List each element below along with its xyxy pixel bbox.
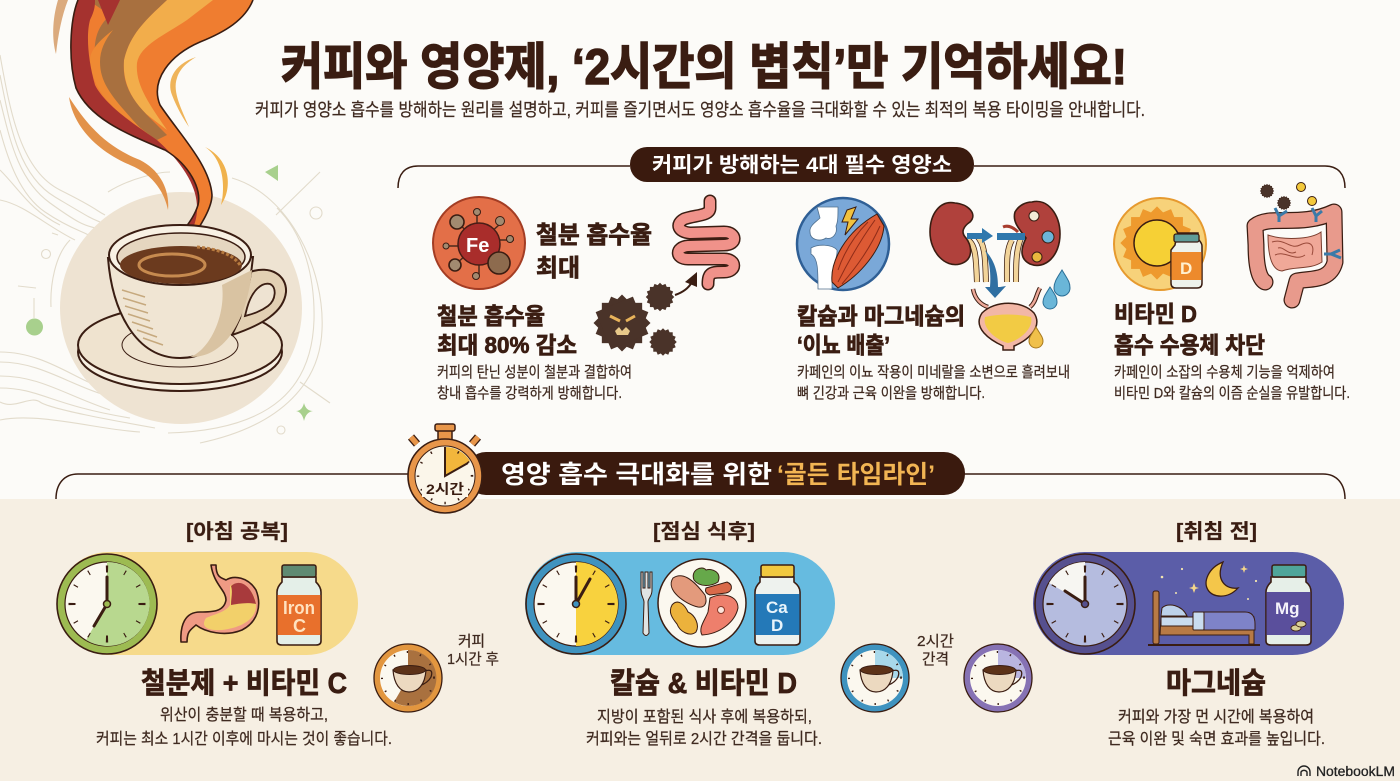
icon: intestine: [678, 201, 734, 284]
icon: bladder: [973, 288, 1040, 350]
icon: water drops: [1029, 270, 1070, 348]
text: vitamin D description: 카페인이 소잡의 수용체 기능을 억제하여: [1114, 364, 1335, 381]
icon: sun and vitamin D bottle: D: [1180, 259, 1192, 278]
text: two hour interval: [917, 633, 954, 668]
icon: Mg bottle: [1266, 565, 1311, 645]
icon: iron C bottle: C: [293, 616, 306, 636]
text: lunch label: [점심 식후]: [653, 520, 755, 543]
text: iron label: 철분 흡수율: [536, 222, 652, 249]
icon: coffee clock purple: [964, 644, 1032, 712]
icon: coffee steam: [53, 0, 253, 264]
text: morning description: 위산이 충분할 때 복용하고,: [160, 706, 328, 724]
icon: stomach: [181, 565, 259, 642]
panel: calcium and magnesium: [797, 198, 1070, 402]
icon: bone and muscle: [797, 198, 889, 290]
text: bedtime description: [1108, 708, 1325, 748]
icon: iron molecule: Fe: [466, 235, 489, 257]
text: iron description: 커피의 탄닌 성분이 철분과 결합하여: [437, 364, 632, 381]
text: lunch description: 지방이 포함된 식사 후에 복용하되,: [597, 708, 812, 726]
decorative background line art: [0, 55, 330, 443]
text: vitamin D description: 비타민 D와 칼슘의 이즘 순실을 유발합니다.: [1114, 385, 1350, 402]
icon: iron C bottle: [277, 565, 321, 645]
text: vitamin D description: [1114, 364, 1350, 402]
text: morning description: 커피는 최소 1시간 이후에 마시는 것이 좋습니다.: [96, 730, 392, 748]
text: coffee one hour after: [447, 633, 499, 668]
icon: plate with food: [658, 559, 746, 647]
icon: stopwatch: [408, 424, 482, 513]
icon: coffee clock blue: [841, 644, 909, 712]
text: bedtime heading: 마그네슘: [1166, 667, 1266, 700]
icon: fork: [641, 572, 652, 636]
text: lunch heading: 칼슘 & 비타민 D: [610, 667, 797, 700]
panel: bedtime: [1033, 520, 1344, 748]
section heading: golden timeline: [56, 452, 1345, 499]
text: iron description: [437, 364, 632, 402]
text: two hour interval: 2시간: [917, 633, 954, 650]
text: calcium description: 카페인의 이뇨 작용이 미네랄을 소변으로 흘려보내: [797, 364, 1070, 381]
text: lunch description: [586, 708, 822, 748]
text: bedtime label: [취침 전]: [1176, 520, 1257, 543]
text: coffee one hour after: 커피: [458, 633, 485, 650]
text: coffee one hour after: 1시간 후: [447, 651, 499, 668]
panel: morning: [57, 520, 392, 748]
text: morning label: [아침 공복]: [186, 520, 288, 543]
text: vitamin D heading: 비타민 D: [1114, 301, 1197, 327]
text: calcium heading line 2: ‘이뇨 배출’: [797, 332, 890, 358]
icon: stopwatch: 2시간: [426, 481, 464, 497]
text: iron description: 창내 흡수를 강력하게 방해합니다.: [437, 385, 622, 402]
section heading: golden timeline: ‘골든 타임라인’: [777, 461, 935, 489]
icon: coffee clock one hour: [374, 644, 442, 712]
title: 커피와 영양제, ‘2시간의 볍칙’만 기억하세요!: [281, 39, 1127, 95]
icon: large intestine with receptors: [1255, 182, 1341, 300]
text: iron heading: 철분 흡수율: [437, 303, 545, 329]
subtitle: 커피가 영양소 흡수를 방해하는 원리를 설명하고, 커피를 즐기면서도 영양소 흡수율을 극대화할 수 있는 최적의 복용 타이밍을 안내합니다.: [255, 100, 1145, 120]
icon: green decorations: [26, 165, 313, 421]
panel: vitamin D: [1114, 182, 1350, 402]
section heading: golden timeline: 영양 흡수 극대화를 위한: [501, 461, 772, 489]
cup backdrop circle: [60, 192, 302, 424]
icon: moon and stars: [1161, 562, 1257, 600]
text: bedtime description: 커피와 가장 먼 시간에 복용하여: [1118, 708, 1314, 726]
icon: iron C bottle: Iron: [283, 598, 315, 618]
icon: coffee cup: [78, 225, 286, 391]
icon: iron molecule: [433, 197, 525, 289]
icon: Ca D bottle: D: [771, 616, 783, 635]
pill: lunch: [525, 552, 835, 655]
icon: sun and vitamin D bottle: [1114, 198, 1206, 290]
text: morning heading: 철분제 + 비타민 C: [141, 667, 347, 700]
text: two hour interval: 간격: [922, 651, 949, 668]
pill: bedtime: [1033, 552, 1344, 655]
section heading: four nutrients: [398, 147, 1345, 188]
panel: iron: [433, 197, 734, 402]
text: morning description: [96, 706, 392, 748]
text: calcium description: [797, 364, 1070, 402]
text: calcium heading: 칼슘과 마그네슘의: [797, 303, 965, 329]
text: lunch description: 커피와는 얼뒤로 2시간 간격을 둡니다.: [586, 730, 822, 748]
text: vitamin D heading line 2: 흡수 수용체 차단: [1114, 332, 1265, 358]
section heading: four nutrients: 커피가 방해하는 4대 필수 영양소: [652, 154, 952, 177]
text: calcium description: 뼈 긴강과 근육 이완을 방해합니다.: [797, 385, 985, 402]
icon: morning clock: [57, 554, 157, 654]
panel: lunch: [525, 520, 835, 748]
icon: kidneys: [930, 201, 1060, 298]
icon: Ca D bottle: Ca: [766, 598, 788, 617]
logo: NotebookLM: NotebookLM: [1316, 764, 1395, 779]
icon: bed: [1148, 591, 1260, 645]
text: iron heading line 2: 최대 80% 감소: [437, 332, 577, 358]
icon: lunch clock: [526, 554, 626, 654]
icon: Mg bottle: Mg: [1275, 599, 1300, 618]
pill: morning: [57, 552, 358, 655]
icon: bedtime clock: [1035, 554, 1135, 654]
text: iron label line 2: 최대: [536, 255, 580, 282]
icon: Ca D bottle: [755, 565, 800, 645]
icon: germs and arrow: [593, 272, 697, 356]
text: bedtime description: 근육 이완 및 숙면 효과를 높입니다.: [1108, 730, 1325, 748]
